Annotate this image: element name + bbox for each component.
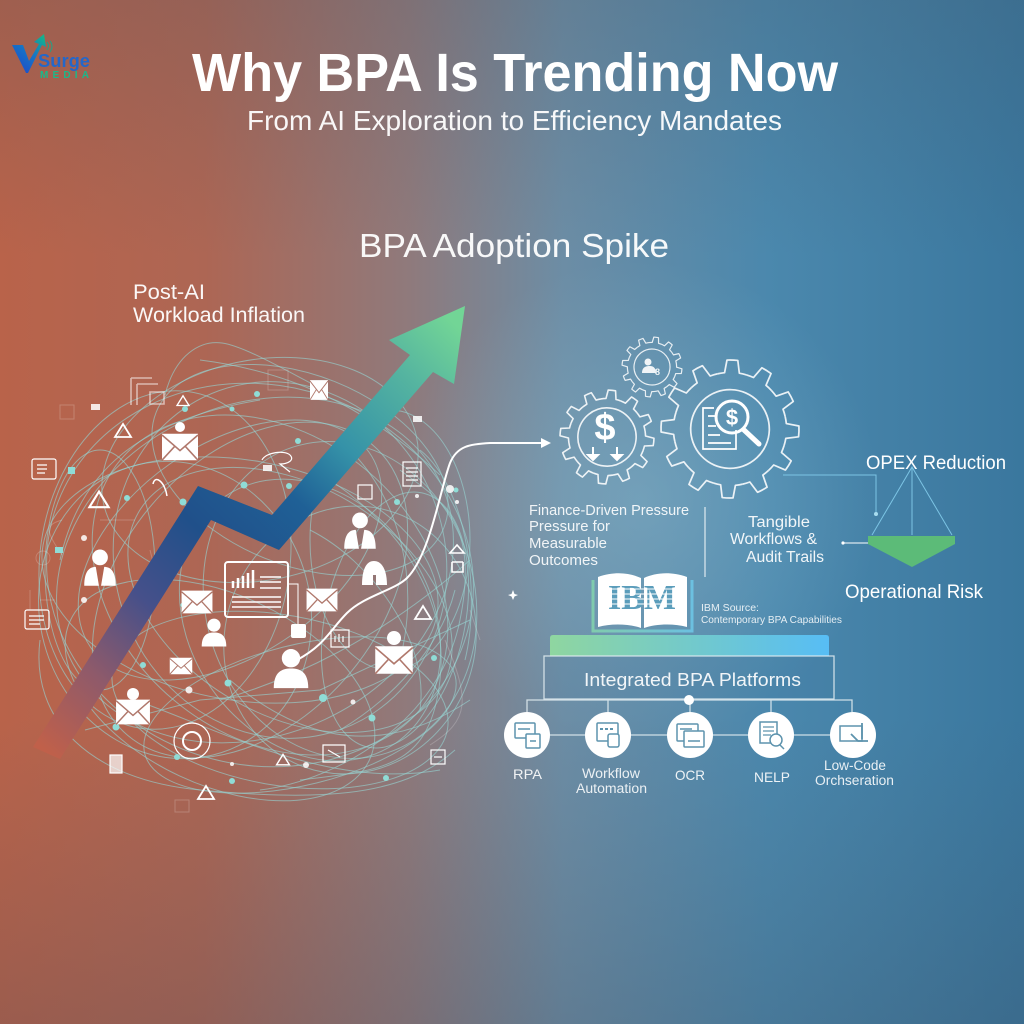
sparkle	[508, 590, 518, 600]
capability: low-code orchestration: Orchseration	[815, 773, 894, 788]
capability: low-code orchestration	[815, 712, 894, 788]
icon: dollar and down arrows: $	[594, 407, 616, 449]
icons: envelopes	[116, 380, 413, 724]
icon: IBM open book: IBM	[608, 578, 676, 617]
icons: small documents and badges	[25, 378, 464, 773]
heading: integrated BPA platforms: Integrated BPA Platforms	[584, 669, 801, 690]
rising arrow: BPA adoption spike	[33, 306, 465, 759]
capability: NELP: NELP	[754, 769, 790, 785]
logo: VSurge Media: Surge	[38, 51, 90, 71]
label: finance-driven pressure: Outcomes	[529, 552, 598, 569]
logo: VSurge Media	[12, 34, 90, 81]
icons: warning triangles	[89, 396, 431, 799]
label: tangible workflows and audit trails	[730, 514, 824, 566]
label: post-AI workload inflation	[133, 281, 305, 327]
heading: BPA adoption spike: BPA Adoption Spike	[359, 227, 669, 264]
gear: team	[618, 333, 686, 401]
label: tangible workflows and audit trails: Tangible	[748, 514, 810, 531]
label: IBM source: IBM Source:	[701, 602, 759, 614]
capability: workflow automation: Automation	[576, 781, 647, 796]
label: IBM source	[701, 602, 842, 626]
icon: document under magnifier: $	[726, 405, 738, 430]
icon: document under magnifier	[703, 401, 759, 449]
platform tree connectors	[527, 695, 853, 735]
label: post-AI workload inflation: Post-AI	[133, 281, 205, 304]
capability: OCR	[667, 712, 713, 783]
icon: team in small gear: 8	[655, 367, 660, 377]
white network nodes	[81, 404, 459, 768]
icon: IBM open book	[593, 573, 692, 631]
capability: NELP	[748, 712, 794, 785]
label: finance-driven pressure: Measurable	[529, 535, 607, 552]
label: tangible workflows and audit trails: Workflows &	[730, 531, 818, 548]
label: IBM source: Contemporary BPA Capabilities	[701, 614, 842, 626]
label: finance-driven pressure: Finance-Driven Pressure	[529, 502, 689, 519]
platform frame	[544, 656, 834, 699]
label: tangible workflows and audit trails: Audit Trails	[746, 549, 824, 566]
label: finance-driven pressure	[529, 502, 689, 569]
logo: VSurge Media: MEDIA	[40, 70, 89, 81]
capability: workflow automation: Workflow	[582, 766, 640, 781]
network nodes	[55, 391, 458, 784]
capability: OCR: OCR	[675, 767, 705, 783]
icon: central report with bar chart	[225, 562, 306, 638]
capability: low-code orchestration: Low-Code	[824, 758, 886, 773]
capability: RPA: RPA	[513, 766, 543, 782]
label: OPEX reduction: OPEX Reduction	[866, 452, 1006, 474]
gear: audit	[659, 358, 801, 500]
faint background diagrams in the network	[30, 370, 480, 812]
balance scale: OPEX vs operational risk	[783, 467, 955, 567]
icon: dollar and down arrows	[588, 407, 622, 460]
network of tangled workload curves	[0, 324, 517, 846]
icons: people	[84, 513, 387, 688]
connector arrow to gears	[297, 438, 551, 660]
label: finance-driven pressure: Pressure for	[529, 518, 610, 535]
title: Why BPA Is Trending Now	[192, 43, 839, 103]
subtitle: From AI Exploration to Efficiency Mandates	[247, 105, 782, 136]
label: post-AI workload inflation: Workload Inflation	[133, 304, 305, 327]
gear: finance	[555, 385, 659, 489]
divider line between labels	[704, 507, 706, 577]
icon: team in small gear	[642, 358, 660, 377]
label: operational risk: Operational Risk	[845, 581, 983, 603]
platform bar	[550, 635, 829, 656]
capability: RPA	[504, 712, 550, 782]
capability: workflow automation	[576, 712, 647, 796]
